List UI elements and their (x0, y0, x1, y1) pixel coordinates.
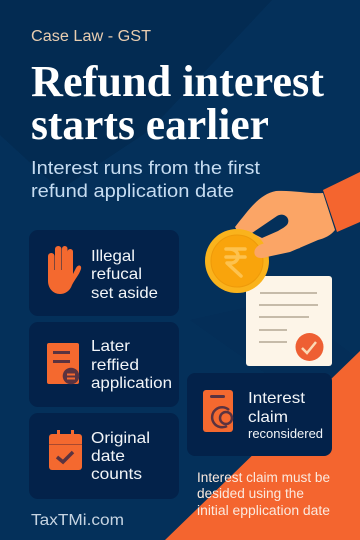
eyebrow label: Case Law - GST (31, 28, 152, 45)
text: original date (91, 430, 150, 483)
text: interest claim (248, 390, 323, 441)
note: initial epplication date (197, 503, 330, 518)
note: Interest claim must be (197, 470, 330, 485)
text: later refiled: reffied (91, 357, 139, 374)
subtitle: refund application date (31, 181, 234, 201)
icon: calendar (49, 430, 82, 470)
text: illegal refusal: refucal (91, 266, 142, 283)
title: starts earlier (31, 100, 269, 149)
panel: interest claim reconsidered (187, 373, 332, 456)
note (197, 470, 330, 518)
text: illegal refusal (91, 248, 158, 302)
title (31, 57, 324, 149)
subtitle (31, 158, 260, 201)
text: later refiled (91, 338, 172, 392)
title: Refund interest (31, 57, 324, 106)
icon: stop hand (48, 246, 81, 294)
sleeve (323, 172, 360, 232)
panel: illegal refusal (29, 230, 179, 316)
text: interest claim: Interest (248, 390, 306, 407)
illustration: hand with coin and document (205, 172, 360, 366)
document (246, 276, 332, 366)
text: interest claim: reconsidered (248, 426, 323, 441)
text: later refiled: Later (91, 338, 131, 355)
coin (205, 229, 269, 293)
panel: original date counts (29, 413, 179, 499)
icon: claim document (203, 390, 233, 432)
text: original date: date (91, 448, 125, 465)
note: desided using the (197, 486, 304, 501)
text: illegal refusal: Illegal (91, 248, 135, 265)
hand (235, 191, 335, 258)
panel: later refiled application (29, 322, 179, 407)
text: later refiled: application (91, 375, 172, 392)
orange diagonal area (165, 351, 360, 540)
icon: document (47, 343, 79, 384)
icon: check badge (296, 333, 324, 361)
text: interest claim: claim (248, 409, 288, 426)
subtitle: Interest runs from the first (31, 158, 260, 178)
icon: rupee sign (226, 249, 245, 276)
text: illegal refusal: set aside (91, 285, 158, 302)
thumb (254, 234, 300, 258)
text: original date: Original (91, 430, 150, 447)
brand: TaxTMi.com (31, 512, 124, 529)
text: original date: counts (91, 466, 142, 483)
